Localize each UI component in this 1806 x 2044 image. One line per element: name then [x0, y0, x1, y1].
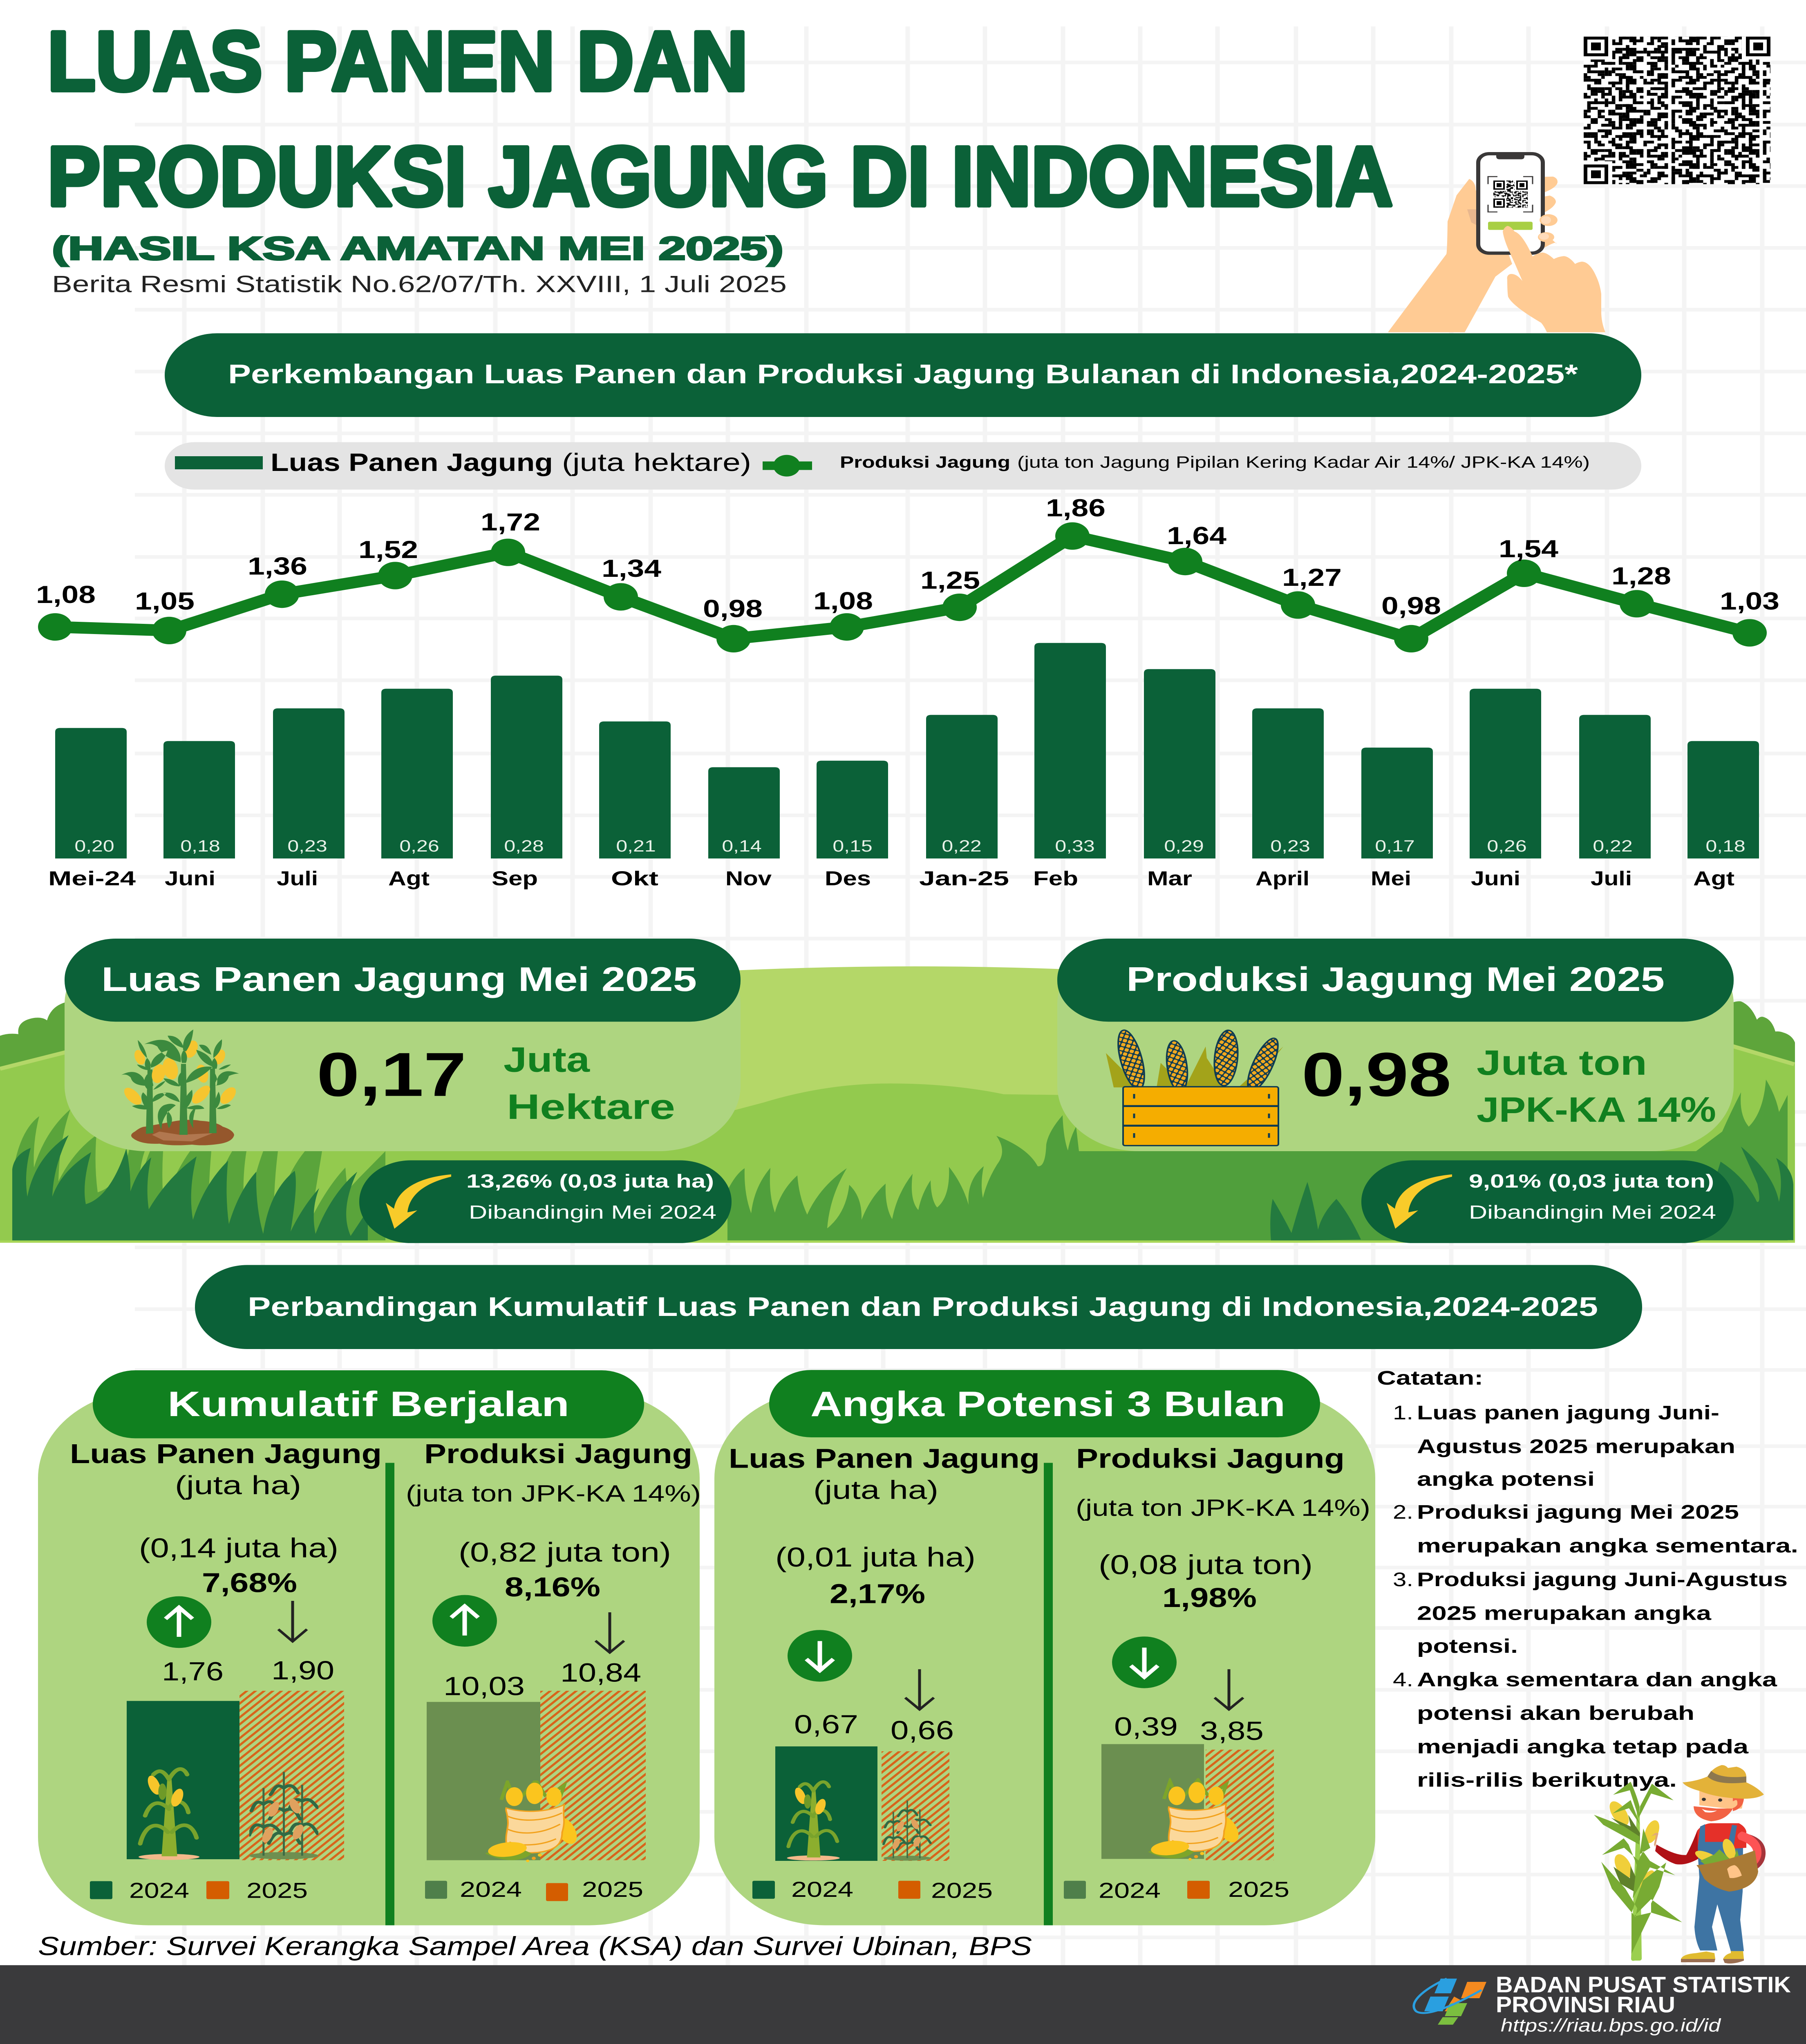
bar chart: luas panen: Mar [1147, 867, 1192, 890]
bar chart: luas panen: Des [825, 867, 871, 890]
heading pill: Angka Potensi 3 Bulan [810, 1384, 1285, 1424]
bar chart: luas panen: 0,28 [504, 837, 544, 855]
produksi column: Produksi Jagung [1076, 1443, 1345, 1474]
line chart: produksi jagung: 0,98 [1381, 592, 1441, 620]
line chart: produksi jagung: 1,54 [1499, 536, 1558, 563]
heading pill [769, 1370, 1320, 1437]
bar chart: luas panen: 0,26 [399, 837, 439, 855]
QR code [1584, 37, 1770, 184]
line chart: produksi jagung: 1,08 [813, 587, 873, 615]
bar chart: luas panen: Jan-25 [919, 867, 1009, 890]
icon: hands holding phone [1388, 154, 1605, 332]
panel: luas panen Mei 2025: Hektare [507, 1087, 675, 1126]
produksi column: 2025 [582, 1877, 643, 1901]
notes: rilis-rilis berikutnya. [1417, 1769, 1677, 1791]
notes [1377, 1367, 1798, 1791]
line chart: produksi jagung: 1,27 [1282, 564, 1342, 591]
bar chart: luas panen: Sep [492, 867, 538, 890]
panel: produksi Mei 2025: Juta ton [1477, 1042, 1647, 1082]
footer: PROVINSI RIAU [1496, 1992, 1675, 2017]
bar chart: luas panen: 0,33 [1055, 837, 1095, 855]
line chart: produksi jagung: 1,08 [36, 581, 96, 608]
banner: cumulative comparison [195, 1265, 1642, 1349]
callout: luas panen change: 13,26% (0,03 juta ha) [466, 1170, 714, 1192]
produksi column: 1,98% [1162, 1582, 1257, 1613]
panel: kumulatif berjalan [38, 1370, 701, 1925]
heading pill: Kumulatif Berjalan [168, 1384, 569, 1424]
luas panen column: 0,67 [794, 1710, 858, 1739]
notes: Produksi jagung Juni-Agustus [1417, 1569, 1788, 1591]
bar chart: luas panen: 0,22 [942, 837, 982, 855]
bar chart: luas panen: 0,23 [287, 837, 327, 855]
produksi column [1064, 1443, 1370, 1903]
produksi column [406, 1439, 701, 1901]
luas panen column: (juta ha) [813, 1475, 938, 1505]
line chart: produksi jagung: 1,86 [1046, 495, 1106, 522]
icon: yellow down arrow [386, 1174, 451, 1229]
footer [0, 1965, 1806, 2044]
notes: Agustus 2025 merupakan [1417, 1435, 1735, 1457]
panel: luas panen Mei 2025: Luas Panen Jagung Mei 2025 [101, 960, 697, 998]
luas panen column: 2,17% [830, 1579, 925, 1609]
icon: corn crate [1106, 1029, 1284, 1145]
bar chart: luas panen: 0,18 [180, 837, 220, 855]
notes: 1. [1393, 1402, 1413, 1424]
produksi column: 2025 [1228, 1877, 1289, 1901]
panel: produksi Mei 2025: 0,98 [1302, 1040, 1451, 1109]
panel: produksi Mei 2025: Produksi Jagung Mei 2025 [1126, 960, 1665, 998]
line chart: produksi jagung: 1,28 [1611, 563, 1671, 590]
notes: 2025 merupakan angka [1417, 1602, 1712, 1624]
produksi column: 10,03 [443, 1672, 525, 1701]
chart legend: Luas Panen Jagung [271, 448, 553, 476]
produksi column: 10,84 [560, 1658, 641, 1688]
luas panen column [729, 1443, 1040, 1903]
luas panen column: 2025 [931, 1878, 993, 1903]
panel: luas panen Mei 2025: Juta [504, 1040, 590, 1079]
produksi column: (0,82 juta ton) [459, 1537, 671, 1568]
title: LUAS PANEN DAN [47, 14, 748, 108]
notes: Luas panen jagung Juni- [1417, 1402, 1719, 1424]
line chart: produksi jagung: 1,36 [248, 553, 307, 580]
produksi column: 3,85 [1200, 1717, 1264, 1746]
notes: merupakan angka sementara. [1417, 1535, 1798, 1557]
bar chart: luas panen: 0,21 [616, 837, 656, 855]
produksi column: Produksi Jagung [424, 1439, 692, 1469]
landscape: hills and grass [0, 966, 1795, 1243]
panel: produksi Mei 2025: JPK-KA 14% [1477, 1089, 1716, 1130]
panel: produksi Mei 2025 [1057, 939, 1734, 1151]
bar chart: luas panen [48, 643, 1759, 890]
illustration: farmer with corn [1594, 1765, 1766, 1963]
farmer figure [1651, 1765, 1766, 1963]
luas panen column: 2024 [129, 1878, 189, 1903]
luas panen column: 7,68% [202, 1567, 297, 1598]
line chart: produksi jagung: 1,72 [481, 509, 540, 536]
chart legend: (juta hektare) [562, 448, 751, 476]
chart legend: Produksi Jagung [840, 453, 1010, 471]
produksi column: (juta ton JPK-KA 14%) [1076, 1495, 1370, 1521]
bar chart: luas panen: 0,29 [1164, 837, 1204, 855]
callout: luas panen change [359, 1160, 732, 1243]
title [47, 14, 1393, 224]
mini QR [1493, 181, 1528, 208]
bar chart: luas panen: Juni [165, 867, 215, 890]
line chart: produksi jagung: 1,25 [920, 567, 980, 594]
luas panen column: (0,14 juta ha) [139, 1533, 338, 1564]
panel: angka potensi 3 bulan [714, 1370, 1375, 1925]
line chart: produksi jagung: 0,98 [703, 596, 763, 623]
bar chart: luas panen: 0,23 [1270, 837, 1310, 855]
corn stalk [1594, 1782, 1682, 1961]
line chart: produksi jagung [36, 495, 1779, 652]
bar chart: luas panen: Mei [1371, 867, 1411, 890]
icon: BPS logo [1414, 1979, 1486, 2025]
subtitle: (HASIL KSA AMATAN MEI 2025) [52, 231, 783, 267]
notes: angka potensi [1417, 1468, 1595, 1490]
bar chart: luas panen: Nov [725, 867, 772, 890]
luas panen column: Luas Panen Jagung [729, 1443, 1040, 1474]
luas panen column: 2025 [246, 1878, 308, 1903]
luas panen column: (juta ha) [175, 1471, 301, 1500]
bar chart: luas panen: April [1255, 867, 1309, 890]
panel: luas panen Mei 2025: 0,17 [317, 1040, 466, 1109]
heading pill [93, 1370, 644, 1438]
notes: Produksi jagung Mei 2025 [1417, 1501, 1739, 1523]
callout: produksi change: Dibandingin Mei 2024 [1469, 1201, 1716, 1223]
line chart: produksi jagung: 1,03 [1720, 588, 1779, 615]
icon: corn field [121, 1029, 239, 1145]
produksi column: 0,39 [1114, 1712, 1178, 1741]
icon: yellow down arrow [1387, 1174, 1452, 1229]
bar chart: luas panen: 0,17 [1375, 837, 1415, 855]
bar chart: luas panen: 0,18 [1705, 837, 1746, 855]
notes: Catatan: [1377, 1367, 1483, 1389]
bar chart: luas panen: 0,20 [74, 837, 114, 855]
bar chart: luas panen: 0,22 [1593, 837, 1633, 855]
callout: produksi change: 9,01% (0,03 juta ton) [1469, 1170, 1714, 1192]
bar chart: luas panen: Juni [1471, 867, 1520, 890]
banner: monthly development: Perkembangan Luas Panen dan Produksi Jagung Bulanan di Indonesia,2024-2025* [228, 359, 1578, 389]
luas panen column: (0,01 juta ha) [775, 1542, 976, 1573]
luas panen column: 2024 [791, 1877, 853, 1901]
source: Sumber: Survei Kerangka Sampel Area (KSA) dan Survei Ubinan, BPS [38, 1932, 1032, 1961]
callout: produksi change [1361, 1160, 1734, 1243]
chart legend [165, 442, 1641, 490]
callout: luas panen change: Dibandingin Mei 2024 [469, 1201, 716, 1223]
luas panen column: Luas Panen Jagung [70, 1439, 382, 1469]
luas panen column: 1,76 [162, 1657, 224, 1686]
footer: https://riau.bps.go.id/id [1501, 2015, 1721, 2035]
bar chart: luas panen: 0,14 [722, 837, 762, 855]
bar chart: luas panen: Mei-24 [48, 867, 136, 890]
notes: menjadi angka tetap pada [1417, 1736, 1749, 1757]
luas panen column: 1,90 [271, 1656, 334, 1685]
produksi column: 2024 [1099, 1878, 1161, 1903]
bar chart: luas panen: 0,26 [1487, 837, 1527, 855]
bar chart: luas panen: Okt [611, 867, 658, 890]
bar chart: luas panen: 0,15 [833, 837, 873, 855]
notes: 4. [1393, 1669, 1413, 1690]
title: PRODUKSI JAGUNG DI INDONESIA [47, 129, 1393, 224]
produksi column: (0,08 juta ton) [1099, 1549, 1313, 1580]
line chart: produksi jagung: 1,64 [1167, 522, 1226, 549]
publication reference: Berita Resmi Statistik No.62/07/Th. XXVIII, 1 Juli 2025 [52, 271, 787, 297]
bar chart: luas panen: Juli [277, 867, 318, 890]
chart legend: (juta ton Jagung Pipilan Kering Kadar Air 14%/ JPK-KA 14%) [1017, 453, 1590, 471]
produksi column: 2024 [460, 1877, 522, 1901]
produksi column: (juta ton JPK-KA 14%) [406, 1480, 701, 1506]
bar chart: luas panen: Agt [1693, 867, 1734, 890]
bar chart: luas panen: Juli [1591, 867, 1632, 890]
panel: luas panen Mei 2025 [65, 939, 741, 1151]
bar chart: luas panen: Agt [388, 867, 430, 890]
notes: potensi akan berubah [1417, 1702, 1694, 1724]
line chart: produksi jagung: 1,05 [135, 588, 195, 615]
banner: cumulative comparison: Perbandingan Kumulatif Luas Panen dan Produksi Jagung di Indonesia,2024-2025 [248, 1292, 1598, 1322]
line chart: produksi jagung: 1,52 [358, 536, 418, 563]
notes: 2. [1393, 1501, 1413, 1523]
notes: 3. [1393, 1569, 1413, 1591]
notes: potensi. [1417, 1635, 1518, 1657]
luas panen column: 0,66 [891, 1716, 954, 1745]
notes: Angka sementara dan angka [1417, 1669, 1777, 1690]
produksi column: 8,16% [505, 1572, 600, 1602]
banner: monthly development [165, 333, 1641, 417]
line chart: produksi jagung: 1,34 [602, 555, 661, 582]
luas panen column [70, 1439, 382, 1903]
bar chart: luas panen: Feb [1033, 867, 1078, 890]
